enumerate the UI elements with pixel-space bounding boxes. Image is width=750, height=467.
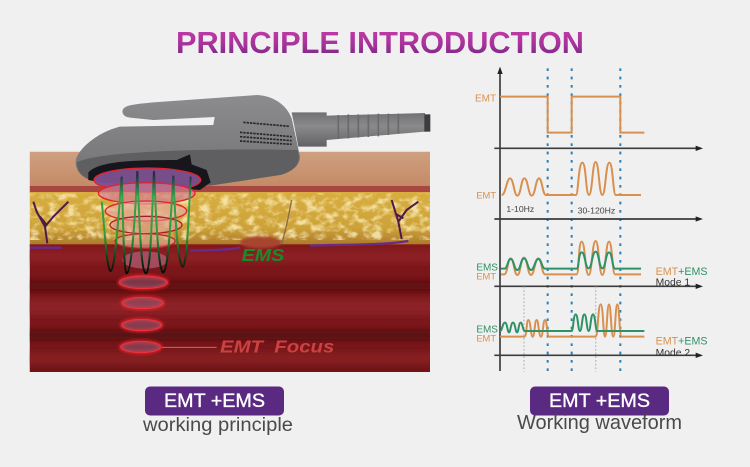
axes (494, 67, 703, 371)
skin layer (30, 152, 430, 187)
tissue layers (20, 152, 440, 372)
EMT label 2: EMT (476, 191, 496, 201)
mode 2 EMT label: EMT (476, 334, 496, 344)
mode 1 legend: EMT+EMS (656, 266, 707, 278)
mode 1 EMS label: EMS (476, 263, 498, 274)
mode guides (524, 287, 596, 372)
dermis band (30, 186, 430, 193)
EMT burst wave (502, 162, 641, 196)
fat layer (30, 192, 430, 247)
pill: right (530, 386, 669, 416)
ring glow (119, 276, 167, 353)
pill: left: EMT +EMS (164, 391, 265, 412)
muscle layer (20, 244, 440, 372)
chart: working waveform (475, 67, 707, 372)
panel: tissue cross-section with handpiece (20, 95, 440, 372)
energy rings: EMT (94, 168, 201, 353)
caption: working waveform: Working waveform (517, 412, 682, 434)
pill: right: EMT +EMS (549, 391, 650, 412)
EMS coil waves (102, 171, 191, 273)
handpiece body (76, 95, 300, 190)
EMT label 1: EMT (475, 93, 496, 104)
mode 1 EMT wave (501, 241, 641, 275)
caption: working principle: working principle (142, 415, 293, 436)
frequency label high: 30-120Hz (578, 206, 615, 216)
fat bump (240, 236, 281, 248)
ring stack (94, 168, 201, 353)
title: PRINCIPLE INTRODUCTION (176, 25, 584, 60)
mode 1 label: Mode 1 (656, 278, 690, 289)
frequency label low: 1-10Hz (506, 204, 534, 214)
mode 1 EMS wave (501, 252, 641, 270)
modes group (476, 241, 707, 372)
EMS label: EMS (242, 245, 284, 265)
mode 2 EMT wave (500, 304, 644, 337)
EMT focus leader line (162, 346, 217, 349)
EMT square wave (500, 97, 644, 133)
EMT Focus label: EMT Focus (220, 337, 335, 357)
mode 2 EMS label: EMS (476, 324, 498, 335)
mode 2 EMS wave (500, 314, 644, 332)
pill: left (145, 386, 284, 416)
mode 2 legend: EMT+EMS (656, 335, 707, 347)
mode 2 label: Mode 2 (656, 348, 690, 359)
mode 1 EMT label: EMT (476, 272, 496, 282)
timing guides (548, 68, 620, 371)
nerves and vessels (30, 200, 418, 251)
cable (292, 112, 430, 147)
